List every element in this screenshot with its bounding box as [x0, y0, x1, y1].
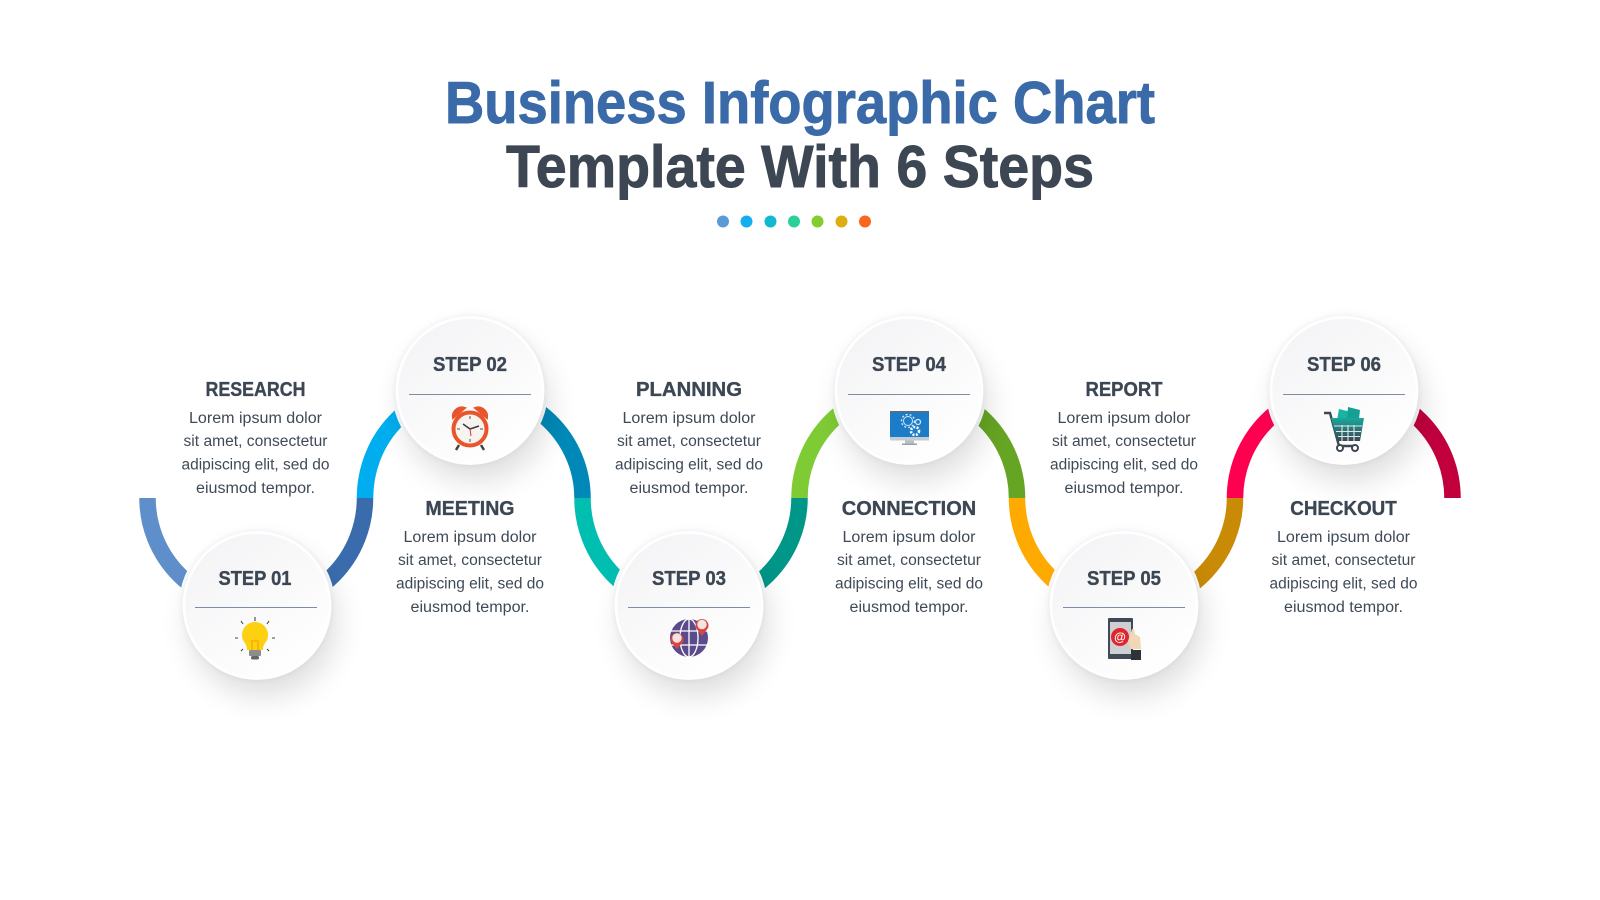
text block: connection: sit amet, consectetur: [837, 552, 981, 569]
panel: step 04 circle: [831, 312, 987, 468]
text block: checkout: eiusmod tempor.: [1284, 599, 1403, 616]
panel: step 01 circle: [179, 528, 335, 684]
icon: tablet with hand: @: [1114, 630, 1126, 644]
text block: report: sit amet, consectetur: [1052, 433, 1196, 450]
text block: report: [1050, 379, 1198, 497]
text block: research: eiusmod tempor.: [196, 480, 315, 497]
text block: meeting: MEETING: [426, 498, 514, 520]
text block: checkout: Lorem ipsum dolor: [1277, 529, 1410, 546]
title: Business Infographic Chart: [445, 70, 1155, 136]
text block: checkout: CHECKOUT: [1290, 498, 1397, 520]
text block: checkout: adipiscing elit, sed do: [1270, 576, 1418, 592]
text block: meeting: [396, 498, 544, 616]
panel: step 03 circle: [611, 528, 767, 684]
text block: planning: adipiscing elit, sed do: [615, 456, 763, 474]
text block: research: Lorem ipsum dolor: [189, 410, 322, 427]
panel: step 03 circle: STEP 03: [652, 568, 726, 590]
icon: tablet with hand: [1108, 618, 1141, 660]
text block: connection: adipiscing elit, sed do: [835, 576, 983, 592]
panel: step 01 circle: STEP 01: [218, 568, 292, 590]
text block: meeting: sit amet, consectetur: [398, 552, 542, 569]
wave connector arcs: [148, 389, 1452, 607]
panel: step 05 circle: STEP 05: [1087, 568, 1161, 590]
panel: step 06 circle: STEP 06: [1307, 354, 1381, 376]
text block: connection: Lorem ipsum dolor: [842, 529, 976, 546]
icon: monitor with gears: [890, 411, 929, 445]
panel: step 02 circle: STEP 02: [433, 354, 507, 376]
text block: planning: eiusmod tempor.: [630, 480, 748, 497]
text block: meeting: eiusmod tempor.: [410, 599, 530, 616]
icon: globe with pins: [670, 619, 708, 657]
text block: research: adipiscing elit, sed do: [182, 456, 330, 474]
text block: meeting: Lorem ipsum dolor: [404, 529, 536, 546]
text block: report: Lorem ipsum dolor: [1058, 410, 1190, 427]
text block: report: eiusmod tempor.: [1064, 480, 1184, 497]
text block: planning: Lorem ipsum dolor: [622, 410, 756, 427]
text block: connection: [835, 498, 983, 616]
panel: step 04 circle: STEP 04: [872, 354, 947, 376]
text block: checkout: sit amet, consectetur: [1272, 552, 1416, 569]
panel: step 02 circle: [392, 312, 548, 468]
text block: planning: PLANNING: [636, 379, 742, 401]
text block: research: sit amet, consectetur: [184, 433, 328, 450]
title: Template With 6 Steps: [506, 134, 1094, 200]
text block: research: RESEARCH: [206, 379, 306, 401]
text block: connection: eiusmod tempor.: [850, 599, 968, 616]
text block: planning: sit amet, consectetur: [617, 433, 761, 450]
icon: shopping cart: [1324, 407, 1364, 451]
text block: research: [182, 379, 330, 497]
panel: step 06 circle: [1266, 312, 1422, 468]
text block: planning: [615, 379, 763, 497]
icon: light bulb: [235, 617, 275, 660]
text block: connection: CONNECTION: [842, 498, 976, 520]
text block: report: adipiscing elit, sed do: [1050, 456, 1198, 474]
text block: checkout: [1270, 498, 1418, 616]
text block: meeting: adipiscing elit, sed do: [396, 576, 544, 592]
title: [445, 70, 1155, 200]
icon: alarm clock: [453, 407, 487, 450]
colored dots row: [717, 216, 871, 228]
text block: report: REPORT: [1086, 379, 1162, 401]
panel: step 05 circle: [1046, 528, 1202, 684]
